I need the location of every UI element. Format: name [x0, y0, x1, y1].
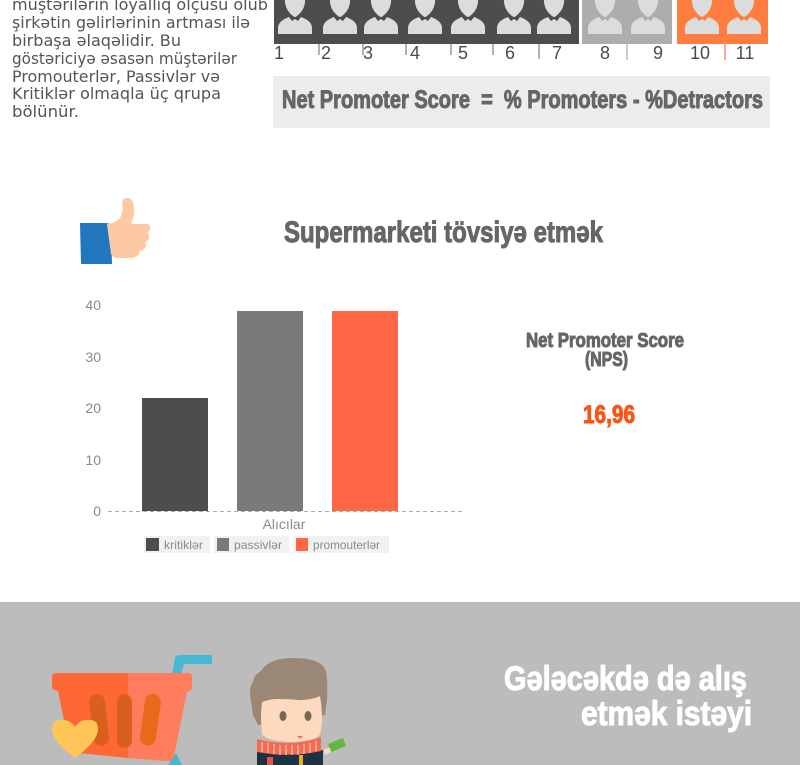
text block: intro paragraph: göstəriciyə əsasən müştərilər — [12, 49, 237, 68]
legend: passivlər — [234, 538, 282, 552]
callout: NPS value: Net Promoter Score — [526, 330, 684, 352]
heading: recommend the supermarket: Supermarketi tövsiyə etmək — [284, 216, 603, 249]
text block: intro paragraph — [12, 0, 268, 121]
bars — [142, 311, 398, 511]
text block: intro paragraph: Kritiklər olmaqla üç qrupa — [12, 84, 221, 103]
panel: passives 8-9 — [582, 0, 672, 44]
y axis labels — [85, 297, 101, 519]
scale numbers and ticks: 3 — [363, 43, 373, 63]
scale numbers and ticks: 4 — [410, 43, 420, 63]
callout: NPS value: 16,96 — [583, 401, 635, 429]
bar chart — [85, 297, 463, 553]
scale numbers and ticks: 1 — [274, 43, 284, 63]
callout: NPS value — [526, 330, 684, 429]
axis title: Alıcılar — [263, 516, 306, 532]
y axis labels: 0 — [93, 503, 101, 519]
panel: promoters 10-11 — [677, 0, 768, 44]
icon: shopping basket with heart — [52, 655, 212, 765]
heading: future purchase intent: etmək istəyi — [581, 695, 752, 733]
text block: intro paragraph: birbaşa əlaqəlidir. Bu — [12, 31, 181, 50]
y axis labels: 10 — [85, 452, 101, 468]
scale numbers and ticks: 11 — [736, 43, 754, 63]
y axis labels: 20 — [85, 400, 101, 416]
scale numbers and ticks: 9 — [653, 43, 663, 63]
text block: intro paragraph: şirkətin gəlirlərinin artması ilə — [12, 13, 250, 32]
heading: future purchase intent — [504, 660, 752, 733]
icon: man holding banknote — [250, 658, 346, 765]
scale numbers and ticks: 8 — [600, 43, 610, 63]
scale numbers and ticks — [274, 40, 754, 63]
text block: intro paragraph: Promouterlər, Passivlər və — [12, 67, 220, 86]
panel: customer scale 1 to 11 — [274, 0, 768, 63]
icon: thumbs up — [80, 198, 150, 264]
y axis labels: 40 — [85, 297, 101, 313]
scale numbers and ticks: 6 — [505, 43, 515, 63]
legend: promouterlər — [313, 538, 380, 552]
scale numbers and ticks: 7 — [552, 43, 562, 63]
scale numbers and ticks: 2 — [321, 43, 331, 63]
legend — [144, 536, 389, 553]
text block: intro paragraph: bölünür. — [12, 102, 79, 121]
y axis labels: 30 — [85, 349, 101, 365]
callout: NPS value: (NPS) — [585, 349, 628, 371]
formula box — [273, 76, 770, 128]
panel: detractors 1-7 — [274, 0, 579, 44]
scale numbers and ticks: 10 — [690, 43, 710, 63]
scale numbers and ticks: 5 — [458, 43, 468, 63]
legend: kritiklər — [164, 538, 203, 552]
heading: future purchase intent: Gələcəkdə də alış — [504, 660, 747, 698]
panel: future purchase intent — [0, 602, 800, 765]
